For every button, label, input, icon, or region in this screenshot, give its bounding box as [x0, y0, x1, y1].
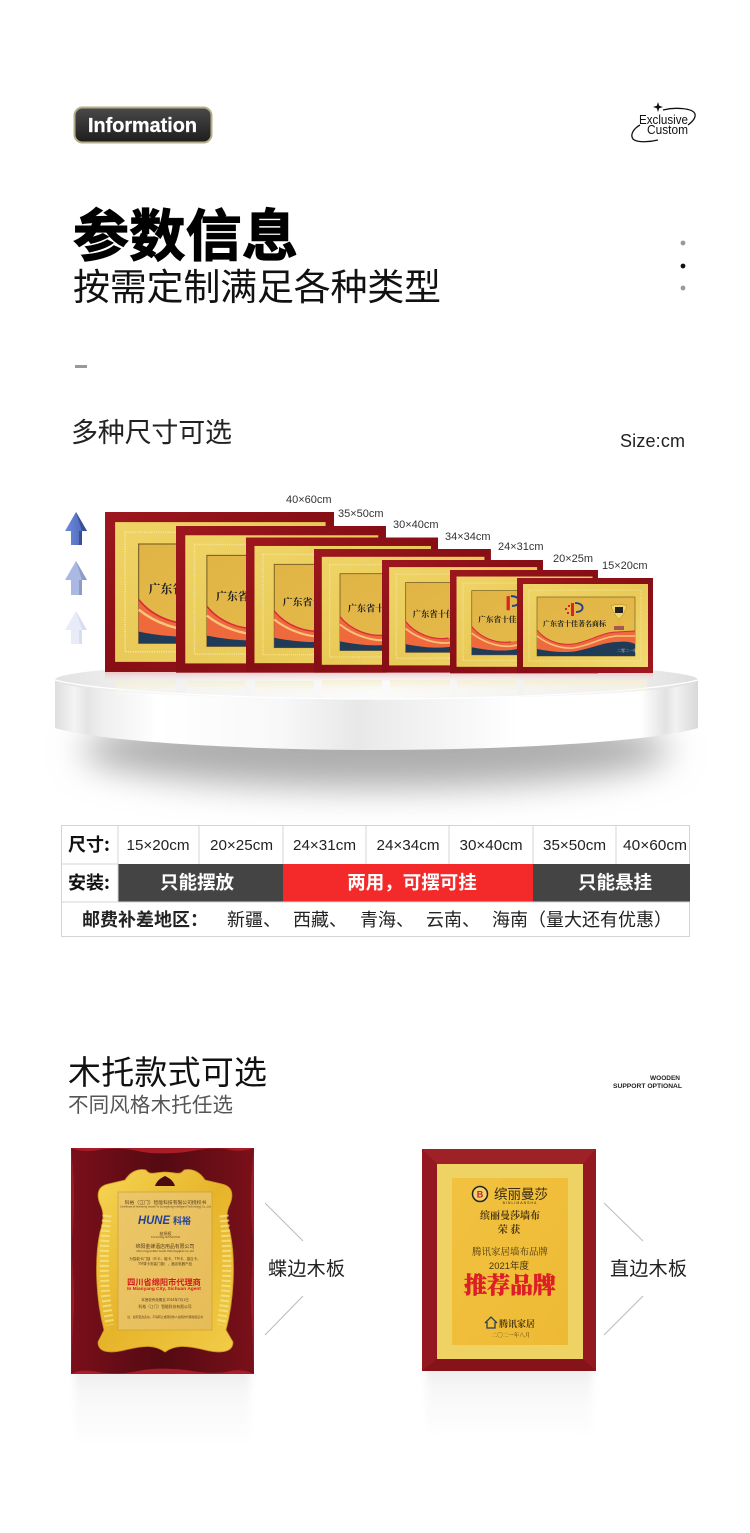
plaque: butterfly edge: TM薄卡安装门锁），酒店电器产品 [138, 1261, 192, 1267]
plaque: straight edge [422, 1149, 596, 1371]
spec table [61, 825, 690, 936]
spec table: 30×40cm [460, 837, 522, 854]
plaque: butterfly edge: In Mianyang City, Sichuan Agent [127, 1286, 201, 1292]
plaque: 20×25cm: 广东省十佳著名商标 [478, 614, 548, 625]
spec table: 40×60cm [623, 837, 687, 854]
decorative dots [681, 241, 685, 290]
logo: Exclusive Custom: Custom [647, 122, 688, 137]
plaque: straight edge: 腾讯家居墙布品牌 [472, 1244, 548, 1258]
heading: sizes: 多种尺寸可选 [71, 411, 232, 450]
spec table: 20×25cm [210, 837, 273, 854]
brand logo [472, 1186, 488, 1202]
size labels: 35×50cm [338, 508, 384, 520]
size labels: 34×34cm [445, 531, 491, 543]
size labels: 40×60cm [286, 494, 332, 506]
plaque: 30×40cm [246, 538, 438, 672]
plaque: butterfly edge: 四川省绵阳市代理商 [127, 1276, 201, 1288]
plaque: butterfly edge: 科裕 [173, 1214, 191, 1227]
plaque: 34×34cm [314, 549, 491, 673]
plaque: straight edge: B [477, 1190, 484, 1200]
plaque: butterfly edge: 为智能卡门锁（IC卡、磁卡、TM卡、感应卡、 [129, 1256, 201, 1262]
plaque: straight edge: BINLIMANSHA [503, 1201, 537, 1205]
spec table: 西藏、 [293, 906, 347, 932]
plaque: straight edge: 推荐品牌 [464, 1267, 556, 1300]
plaque: butterfly edge: 绵阳金蜂酒店用品有限公司 [136, 1243, 194, 1250]
subheading: 不同风格木托任选 [68, 1088, 233, 1118]
plaque: 40×60cm [105, 512, 334, 672]
badge: Information: Information [88, 115, 197, 137]
plaque: 15×20cm: 二零二一年 [617, 647, 637, 654]
plaque: 35×50cm [176, 526, 386, 673]
plaque: butterfly edge: Shen Yang Golden Goods Hotel Supplies Co.,Ltd [136, 1249, 194, 1253]
spec table: 只能悬挂 [578, 869, 652, 895]
spec table: 邮费补差地区： [82, 906, 208, 932]
plaque: 15×20cm: 广东省十佳著名商标 [543, 619, 607, 629]
connector lines: left [265, 1203, 303, 1335]
plaque: 35×50cm: 广东省十佳著名商标 [216, 589, 315, 604]
spec table: 35×50cm [543, 837, 606, 854]
title: 参数信息 [73, 192, 298, 273]
english caption: WOODEN [650, 1075, 680, 1082]
plaque: straight edge: 腾讯家居 [499, 1317, 535, 1330]
plaque: butterfly edge: HUNE [138, 1213, 171, 1227]
spec table: 青海、 [360, 906, 414, 932]
spec table: 15×20cm [126, 837, 190, 854]
plaque: straight edge: 2021年度 [489, 1260, 530, 1272]
arrows [65, 512, 87, 644]
plaque: 20×25cm [450, 570, 598, 673]
plaque: butterfly edge: It is hereby certified that [151, 1235, 180, 1239]
house icon [485, 1317, 497, 1328]
plaque: butterfly edge: 兹授权 [160, 1230, 172, 1237]
platform [55, 661, 698, 788]
gold ornament [97, 1169, 233, 1352]
size labels: 24×31cm [498, 541, 544, 553]
plaque: butterfly edge [71, 1148, 254, 1374]
spec table: 尺寸: [68, 831, 110, 857]
plaque: 34×34cm: 广东省十佳著名商标 [348, 601, 431, 614]
plaque: butterfly edge: 注：如有更改变动，不得转让或转授他人使用的代理授权证书 [127, 1315, 203, 1319]
plaque: 15×20cm [517, 578, 653, 673]
spec table: 两用，可摆可挂 [347, 869, 477, 895]
plaque: 30×40cm: 广东省十佳著名商标 [283, 594, 373, 608]
plaque: butterfly edge: 科裕（江门）智能科技有限公司 [138, 1304, 192, 1310]
badge: Information [74, 108, 212, 142]
connector lines: right [604, 1203, 643, 1335]
english caption: SUPPORT OPTIONAL [613, 1083, 682, 1090]
spec table: 海南（量大还有优惠） [492, 906, 672, 932]
size labels [286, 494, 648, 572]
plaque: straight edge: 二〇二一年八月 [492, 1331, 530, 1339]
plaque: straight edge: 缤丽曼莎墙布 [480, 1207, 540, 1222]
spec table: 云南、 [426, 906, 480, 932]
label: straight board: 直边木板 [610, 1254, 687, 1281]
plaque: straight edge: 缤丽曼莎 [494, 1183, 548, 1203]
spec table: 安装: [68, 869, 110, 895]
heading: wood styles: 木托款式可选 [68, 1046, 267, 1094]
size labels: 15×20cm [602, 560, 648, 572]
plaque: straight edge: 荣 获 [498, 1221, 520, 1236]
reflection: right plaque [426, 1365, 592, 1441]
unit label: Size:cm [620, 431, 685, 451]
size labels: 20×25m [553, 553, 593, 565]
plaque: 24×31cm [382, 560, 543, 672]
reflection: left plaque [75, 1368, 250, 1448]
plaque: 40×60cm: 广东省十佳著名商标 [149, 580, 256, 597]
plaque: butterfly edge: Certificate of Authority Issued To Guangdong Intelligent Technology Co., Ltd [120, 1204, 211, 1208]
subtitle: 按需定制满足各种类型 [73, 257, 441, 311]
spec table: 只能摆放 [160, 869, 234, 895]
spec table: 新疆、 [227, 906, 281, 932]
logo: Exclusive Custom [632, 102, 695, 142]
label: butterfly board: 蝶边木板 [268, 1254, 345, 1281]
logo: Exclusive Custom: Exclusive [639, 112, 688, 127]
plaque: 24×31cm: 广东省十佳著名商标 [413, 608, 488, 620]
plaque: butterfly edge: 科裕（江门）智能科技有限公司授权书 [125, 1199, 206, 1206]
size labels: 30×40cm [393, 519, 439, 531]
english caption [613, 1075, 682, 1090]
spec table: 24×31cm [293, 837, 356, 854]
certificate panel [118, 1192, 212, 1330]
spec table: 24×34cm [376, 837, 440, 854]
plaque: butterfly edge: 本授权有效期至 2024年7月1日 [141, 1297, 189, 1303]
